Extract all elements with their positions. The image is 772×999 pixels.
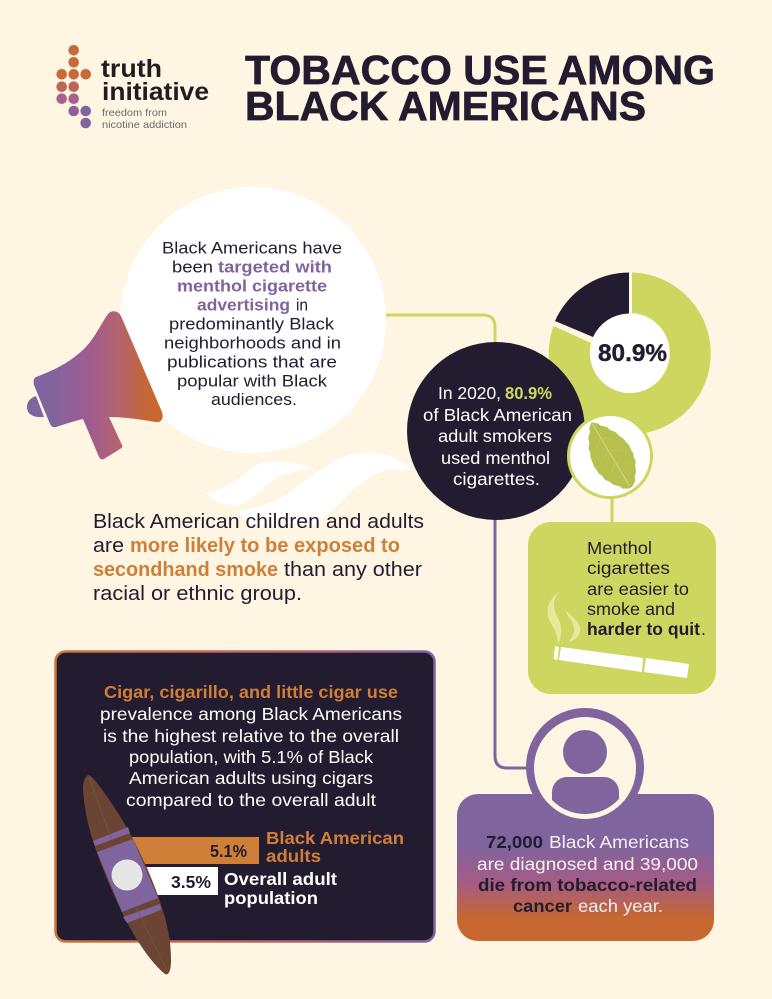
logo tagline — [102, 107, 187, 131]
text: cancer statistic: Black Americans — [549, 832, 689, 852]
connector: green line from advertising circle to menthol circle — [380, 315, 495, 350]
text: advertising: advertising — [197, 296, 290, 315]
text: secondhand smoke: more likely to be exposed to — [130, 535, 400, 557]
text: cancer statistic: are diagnosed and 39,000 — [477, 854, 698, 874]
connector: purple line to cancer card — [495, 515, 535, 768]
text: secondhand smoke: racial or ethnic group. — [93, 583, 302, 605]
text: advertising: audiences. — [211, 390, 297, 409]
bar label: Black American adults: adults — [266, 846, 321, 866]
text: cancer statistic: each year. — [578, 896, 663, 916]
bar: Black American adults 5.1%: 5.1% — [210, 841, 247, 861]
panel: cancer statistic — [457, 708, 714, 941]
text: menthol statistic: cigarettes. — [453, 469, 540, 489]
icon: cigar — [83, 775, 171, 974]
text: secondhand smoke: Black American children and adults — [93, 511, 424, 533]
text: secondhand smoke — [93, 511, 424, 605]
text: secondhand smoke: secondhand smoke — [93, 559, 278, 581]
text: cancer statistic — [477, 832, 698, 916]
panel: menthol statistic circle — [407, 342, 585, 520]
text: harder to quit — [587, 538, 706, 639]
panel: cigar use — [56, 652, 434, 942]
icon: person — [526, 708, 644, 827]
text: cancer statistic: die from tobacco-related — [478, 875, 697, 895]
bar: overall adult population 3.5%: 3.5% — [171, 872, 211, 892]
icon: cigarette with smoke — [548, 590, 689, 678]
text: secondhand smoke: than any other — [284, 559, 422, 581]
text: harder to quit: . — [701, 619, 706, 639]
text: menthol statistic — [423, 383, 572, 489]
text: advertising — [162, 238, 342, 409]
logo wordmark: initiative — [102, 78, 209, 106]
logo: truth initiative — [56, 45, 209, 131]
text: menthol statistic: used menthol — [441, 448, 550, 468]
text: cigar prevalence: American adults using cigars — [129, 768, 373, 788]
text: menthol statistic: adult smokers — [438, 426, 552, 446]
text: advertising: popular with Black — [177, 372, 328, 391]
bar label: overall adult population: population — [224, 888, 318, 908]
icon: logo dots — [56, 45, 91, 128]
text: advertising: menthol cigarette — [177, 277, 327, 296]
logo tagline: nicotine addiction — [102, 119, 187, 131]
panel: advertising circle — [120, 187, 386, 453]
text: cigar prevalence: is the highest relative to the overall — [103, 726, 399, 746]
icon: mint leaf — [568, 412, 652, 498]
title — [245, 47, 715, 129]
logo tagline: freedom from — [102, 107, 167, 119]
text: advertising: targeted with — [218, 258, 332, 277]
text: cancer statistic: 72,000 — [486, 832, 543, 852]
text: menthol statistic: In 2020, — [438, 383, 501, 403]
title: TOBACCO USE AMONG — [245, 47, 715, 93]
text: harder to quit: cigarettes — [587, 558, 670, 578]
text: advertising: neighborhoods and in — [164, 333, 341, 352]
text: cigar prevalence: Cigar, cigarillo, and little cigar use — [104, 682, 398, 702]
decoration: white smoke wisps — [205, 452, 413, 524]
text: harder to quit: Menthol — [587, 538, 652, 558]
text: harder to quit: are easier to — [587, 579, 689, 599]
bar label: overall adult population: Overall adult — [224, 869, 337, 889]
text: harder to quit: harder to quit — [587, 619, 700, 639]
text: cancer statistic: cancer — [513, 896, 572, 916]
text: menthol statistic: 80.9% — [505, 383, 552, 403]
text: advertising: publications that are — [167, 352, 337, 371]
text: cigar prevalence: compared to the overall adult — [126, 790, 376, 810]
bar label: Black American adults — [266, 828, 404, 866]
text: secondhand smoke: are — [93, 535, 124, 557]
text: advertising: Black Americans have — [162, 238, 342, 257]
title: BLACK AMERICANS — [245, 83, 646, 129]
text: advertising: been — [172, 258, 213, 277]
bar: Black American adults 5.1% — [120, 837, 259, 864]
logo wordmark — [101, 55, 209, 106]
text: harder to quit: smoke and — [587, 599, 675, 619]
text: advertising: in — [296, 296, 308, 315]
text: menthol statistic: of Black American — [423, 405, 572, 425]
text: cigar prevalence: prevalence among Black Americans — [100, 704, 402, 724]
icon: megaphone — [27, 311, 163, 459]
connector: green line from leaf to green card — [610, 495, 614, 525]
donut value: 80.9% — [598, 340, 667, 367]
logo wordmark: truth — [101, 55, 162, 83]
panel: menthol harder to quit — [528, 522, 716, 694]
bar: overall adult population 3.5% — [130, 867, 218, 895]
text: advertising: predominantly Black — [169, 315, 335, 334]
text: cigar prevalence — [100, 682, 402, 810]
text: cigar prevalence: population, with 5.1% of Black — [129, 747, 373, 767]
chart: menthol donut — [549, 272, 711, 434]
bar label: overall adult population — [224, 869, 337, 908]
bar label: Black American adults: Black American — [266, 828, 404, 848]
